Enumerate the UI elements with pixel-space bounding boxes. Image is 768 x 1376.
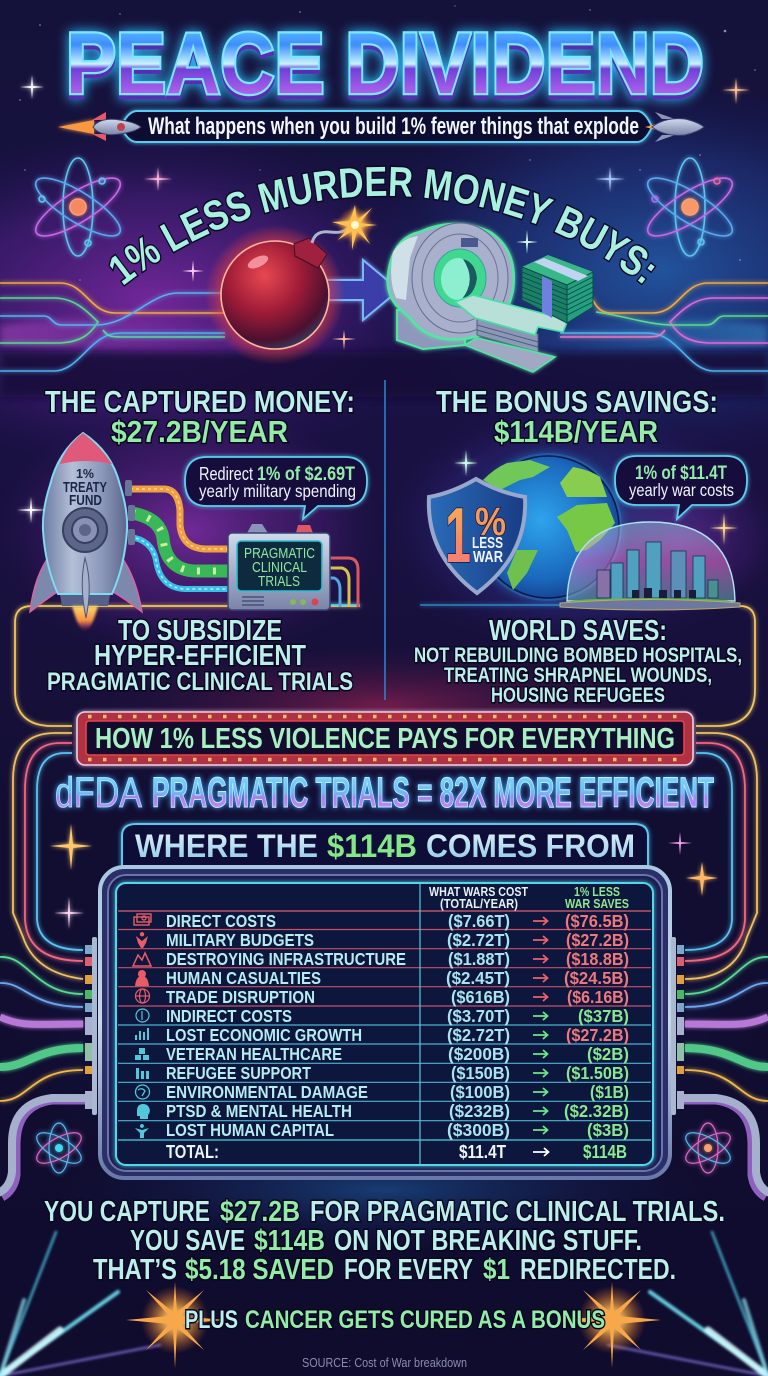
heading: captured money: $27.2B/YEAR [111, 414, 288, 449]
total cost values: $11.4T [459, 1142, 506, 1162]
heading: bonus savings: THE BONUS SAVINGS: [436, 384, 718, 419]
text: to subsidize: HYPER-EFFICIENT [94, 640, 306, 672]
text: world saves [414, 615, 742, 707]
row labels: REFUGEE SUPPORT [166, 1063, 311, 1083]
row icons [133, 914, 151, 1138]
table header: (TOTAL/YEAR) [440, 897, 518, 911]
callout: war costs: 1% of $11.4T [635, 463, 727, 484]
text: world saves: WORLD SAVES: [489, 615, 667, 647]
icon: pragmatic clinical trials machine: PRAGMATIC [244, 545, 315, 562]
heading: captured money: THE CAPTURED MONEY: [45, 384, 355, 419]
row labels: TOTAL: [166, 1142, 219, 1162]
text: to subsidize: PRAGMATIC CLINICAL TRIALS [47, 668, 353, 696]
icon: pragmatic clinical trials machine [228, 524, 330, 610]
arched heading: 1% LESS MURDER MONEY BUYS: [108, 166, 656, 287]
total cost values: ($3.70T) [447, 1006, 510, 1026]
heading box: where the money comes from [122, 824, 648, 868]
summary text: YOU SAVE [130, 1225, 245, 1257]
summary text [44, 1196, 725, 1286]
row labels: DIRECT COSTS [166, 911, 276, 931]
icon: right rocket [645, 112, 704, 142]
icon: money stack [522, 255, 593, 323]
summary text: $27.2B [220, 1196, 300, 1228]
callout: redirect: yearly military spending [199, 481, 356, 501]
row labels: MILITARY BUDGETS [166, 930, 314, 950]
subtitle pill [121, 111, 652, 142]
icon: 1 percent less war shield: % [475, 500, 506, 544]
table header: 1% LESS [574, 885, 620, 899]
row labels [166, 911, 406, 1162]
callout: war costs [615, 456, 747, 519]
callout: redirect: Redirect [199, 464, 253, 484]
bonus line: PLUS [185, 1306, 238, 1334]
yellow frame lines around lower panels [15, 605, 755, 726]
panel: cost table [85, 867, 684, 1178]
icon: MRI scanner [388, 223, 568, 372]
row labels: INDIRECT COSTS [166, 1006, 292, 1026]
icon: pragmatic clinical trials machine: CLINICAL [252, 559, 307, 576]
row labels: VETERAN HEALTHCARE [166, 1044, 342, 1064]
bottom light rays [0, 1232, 768, 1376]
total cost values: ($7.66T) [448, 911, 510, 931]
summary text: THAT’S [93, 1254, 177, 1286]
text: to subsidize [47, 615, 353, 696]
heading: bonus savings [436, 384, 718, 449]
icon: globe [474, 453, 622, 601]
text: world saves: HOUSING REFUGEES [491, 684, 665, 707]
row labels: HUMAN CASUALTIES [166, 968, 321, 988]
icon: lower right atom [681, 1123, 735, 1173]
savings values: ($18.8B) [566, 949, 629, 969]
pipes: rocket to machine [130, 489, 358, 607]
heading box: where the money comes from: WHERE THE [135, 828, 318, 864]
heading: captured money [45, 384, 355, 449]
row labels: LOST HUMAN CAPITAL [166, 1120, 334, 1140]
summary text: $114B [254, 1225, 325, 1257]
total cost values: ($616B) [451, 987, 510, 1007]
total cost values: ($1.88T) [448, 949, 510, 969]
icon: arrow from bomb to scanner [322, 260, 399, 320]
savings values: ($76.5B) [565, 911, 629, 931]
icon: 1 percent less war shield [429, 479, 525, 593]
savings values: ($2B) [587, 1044, 629, 1064]
summary text: FOR EVERY [344, 1254, 473, 1286]
icon: rocket treaty fund [30, 433, 142, 630]
icon: lower left atom [32, 1123, 86, 1173]
savings values: ($1.50B) [566, 1063, 629, 1083]
callout: redirect: 1% of $2.69T [257, 464, 355, 485]
table header: WAR SAVES [565, 897, 629, 911]
savings values: ($2.32B) [564, 1101, 629, 1121]
savings values: $114B [583, 1142, 627, 1162]
total cost values: ($2.72T) [447, 1025, 510, 1045]
icon: 1 percent less war shield: WAR [473, 549, 503, 566]
savings values: ($1B) [590, 1082, 629, 1102]
icon: 1 percent less war shield: 1 [445, 491, 471, 579]
total cost values: ($200B) [448, 1044, 510, 1064]
savings values: ($24.5B) [564, 968, 629, 988]
icon: rocket treaty fund: 1% [76, 466, 94, 481]
icon: rocket treaty fund: FUND [69, 492, 102, 509]
row labels: TRADE DISRUPTION [166, 987, 315, 1007]
table header: WHAT WARS COST [429, 885, 528, 899]
source note: SOURCE: Cost of War breakdown [302, 1356, 467, 1370]
icon: left rocket [58, 112, 141, 141]
icon: burst left [126, 1282, 224, 1368]
summary text: $5.18 SAVED [185, 1254, 334, 1286]
banner [77, 712, 693, 765]
savings values: ($27.2B) [566, 1025, 629, 1045]
total cost values: ($232B) [449, 1101, 510, 1121]
total cost values: ($150B) [451, 1063, 510, 1083]
savings values: ($27.2B) [566, 930, 629, 950]
savings values [564, 911, 629, 1162]
callout: war costs: yearly war costs [629, 480, 734, 500]
sparkle stars [20, 75, 750, 350]
icon: right atom [640, 158, 740, 256]
large stars near table [50, 824, 718, 929]
savings values: ($6.16B) [567, 987, 629, 1007]
neon lines from banner around table [13, 733, 757, 979]
icon: bomb [205, 205, 377, 365]
icon: left atom [28, 158, 128, 256]
bonus line: CANCER GETS CURED AS A BONUS [245, 1306, 605, 1334]
summary text: ON NOT BREAKING STUFF. [334, 1225, 642, 1257]
row labels: ENVIRONMENTAL DAMAGE [166, 1082, 368, 1102]
savings values: ($3B) [587, 1120, 629, 1140]
summary text: $1 [483, 1254, 510, 1286]
row labels: DESTROYING INFRASTRUCTURE [166, 949, 406, 969]
heading box: where the money comes from: $114B [327, 828, 417, 864]
icon: burst right [563, 1282, 661, 1368]
top circuit lines [0, 283, 768, 371]
summary text: YOU CAPTURE [44, 1196, 210, 1228]
heading: dFDA efficiency: dFDA [55, 769, 142, 817]
panel stars [17, 450, 738, 545]
summary text: REDIRECTED. [520, 1254, 676, 1286]
neon lines into table [0, 957, 768, 1101]
text: to subsidize: TO SUBSIDIZE [118, 615, 282, 647]
total cost values: ($100B) [450, 1082, 510, 1102]
icon: protected city dome [560, 522, 740, 610]
table header [429, 885, 629, 911]
total cost values [446, 911, 510, 1162]
icon: pragmatic clinical trials machine: TRIALS [258, 573, 300, 590]
icon: rocket treaty fund: TREATY [63, 479, 107, 496]
heading: bonus savings: $114B/YEAR [494, 414, 658, 449]
divider [384, 380, 386, 700]
row labels: PTSD & MENTAL HEALTH [166, 1101, 352, 1121]
callout: redirect [185, 457, 367, 519]
heading box: where the money comes from: COMES FROM [426, 828, 635, 864]
total cost values: ($2.72T) [447, 930, 510, 950]
savings values: ($37B) [578, 1006, 629, 1026]
row labels: LOST ECONOMIC GROWTH [166, 1025, 362, 1045]
total cost values: ($300B) [447, 1120, 510, 1140]
row arrows [533, 917, 548, 1156]
silver pipes [0, 1098, 768, 1197]
total cost values: ($2.45T) [446, 968, 510, 988]
icon: 1 percent less war shield: LESS [472, 535, 503, 552]
